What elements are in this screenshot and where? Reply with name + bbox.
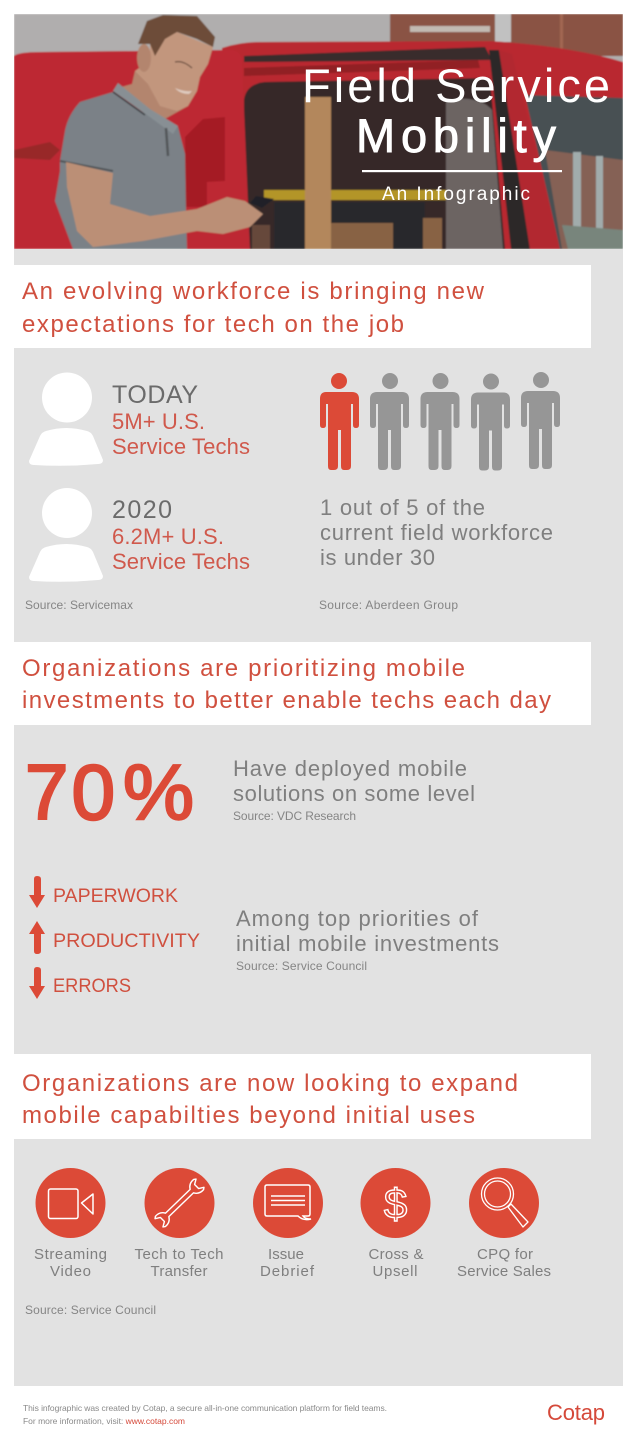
icon: magnifier <box>469 1168 539 1238</box>
title: Field Service Mobility: An Infographic <box>382 184 530 205</box>
text: 2020 stat: 6.2M+ U.S. <box>112 524 224 549</box>
label: productivity: PRODUCTIVITY <box>53 931 200 952</box>
text: today stat: Service Techs <box>112 434 250 459</box>
text: top priorities <box>236 906 499 973</box>
source: Servicemax: Source: Servicemax <box>25 598 133 612</box>
arrow: paperwork down <box>29 876 45 908</box>
heading: prioritizing mobile investments <box>14 642 591 725</box>
pictogram: 1 of 5 workers <box>320 372 560 470</box>
text: 1 out of 5: current field workforce <box>320 520 553 545</box>
text: 1 out of 5: 1 out of 5 of the <box>320 495 485 520</box>
heading: prioritizing mobile investments: Organizations are prioritizing mobile <box>22 655 465 682</box>
label: tech to tech transfer: Transfer <box>150 1263 208 1280</box>
heading: expand mobile capabilities <box>14 1054 591 1139</box>
source: Aberdeen Group: Source: Aberdeen Group <box>319 598 458 612</box>
text: top priorities: Among top priorities of <box>236 906 479 931</box>
icon: gray worker 5 <box>521 372 560 469</box>
label: cpq for service sales <box>457 1246 551 1280</box>
heading: expand mobile capabilities: Organizations are now looking to expand <box>22 1070 518 1097</box>
text: today stat <box>112 381 250 459</box>
icon: red worker <box>320 373 359 470</box>
label: cpq for service sales: CPQ for <box>477 1246 533 1263</box>
arrow: errors down <box>29 967 45 999</box>
icon: avatar today <box>29 372 103 466</box>
heading: prioritizing mobile investments: investments to better enable techs each day <box>22 687 551 714</box>
icon: gray worker 2 <box>370 373 409 470</box>
label: errors: ERRORS <box>53 976 131 997</box>
icon: avatar 2020 <box>29 488 103 582</box>
heading: expand mobile capabilities: mobile capabilties beyond initial uses <box>22 1102 475 1129</box>
text: top priorities: initial mobile investments <box>236 931 499 956</box>
label: streaming video: Streaming <box>34 1246 107 1263</box>
text: deployed mobile solutions: Source: VDC Research <box>233 809 356 823</box>
footer text: For more information, visit: www.cotap.com <box>23 1416 185 1426</box>
text: 1 out of 5 <box>320 495 553 570</box>
icon: dollar: $ <box>384 1180 407 1227</box>
panel: page background <box>14 249 623 1386</box>
text: 2020 stat <box>112 496 250 574</box>
label: issue debrief <box>260 1246 315 1280</box>
icon: gray worker 4 <box>471 374 510 470</box>
stat: 70 percent <box>25 748 194 836</box>
text: 1 out of 5: is under 30 <box>320 545 435 570</box>
footer text <box>23 1403 387 1426</box>
text: deployed mobile solutions: solutions on some level <box>233 781 475 806</box>
label: cpq for service sales: Service Sales <box>457 1263 551 1280</box>
icon: streaming video <box>36 1168 106 1238</box>
label: paperwork: PAPERWORK <box>53 886 178 907</box>
title: Field Service Mobility: Field Service <box>302 59 610 112</box>
footer text: This infographic was created by Cotap, a secure all-in-one communication platform for field teams. <box>23 1403 387 1413</box>
source: Service Council: Source: Service Council <box>25 1303 156 1317</box>
stat: 70 percent: 70 <box>25 748 115 836</box>
text: deployed mobile solutions: Have deployed mobile <box>233 756 467 781</box>
text: 2020 stat: Service Techs <box>112 549 250 574</box>
label: cross and upsell: Upsell <box>372 1263 418 1280</box>
header photo: technician with red van <box>14 14 623 249</box>
label: streaming video <box>34 1246 107 1280</box>
heading: evolving workforce <box>14 265 591 348</box>
logo: Cotap: Cotap <box>547 1400 605 1425</box>
text: deployed mobile solutions <box>233 756 475 823</box>
stat: 70 percent: % <box>123 748 194 836</box>
heading: evolving workforce: An evolving workforce is bringing new <box>22 278 485 305</box>
arrow: productivity up <box>29 921 45 954</box>
label: cross and upsell <box>368 1246 424 1280</box>
label: issue debrief: Issue <box>268 1246 304 1263</box>
label: streaming video: Video <box>50 1263 91 1280</box>
icon: gray worker 3 <box>420 373 460 470</box>
icon: wrench <box>144 1168 214 1238</box>
text: today stat: TODAY <box>112 381 198 409</box>
label: issue debrief: Debrief <box>260 1263 315 1280</box>
text: 2020 stat: 2020 <box>112 496 172 524</box>
icon: dollar <box>360 1168 430 1238</box>
icon: speech bubble <box>253 1168 323 1238</box>
title: Field Service Mobility: Mobility <box>356 109 556 162</box>
text: top priorities: Source: Service Council <box>236 959 367 973</box>
text: today stat: 5M+ U.S. <box>112 409 205 434</box>
label: tech to tech transfer: Tech to Tech <box>134 1246 224 1263</box>
label: cross and upsell: Cross & <box>368 1246 424 1263</box>
title: Field Service Mobility <box>302 59 610 205</box>
heading: evolving workforce: expectations for tech on the job <box>22 311 404 338</box>
label: tech to tech transfer <box>134 1246 224 1280</box>
